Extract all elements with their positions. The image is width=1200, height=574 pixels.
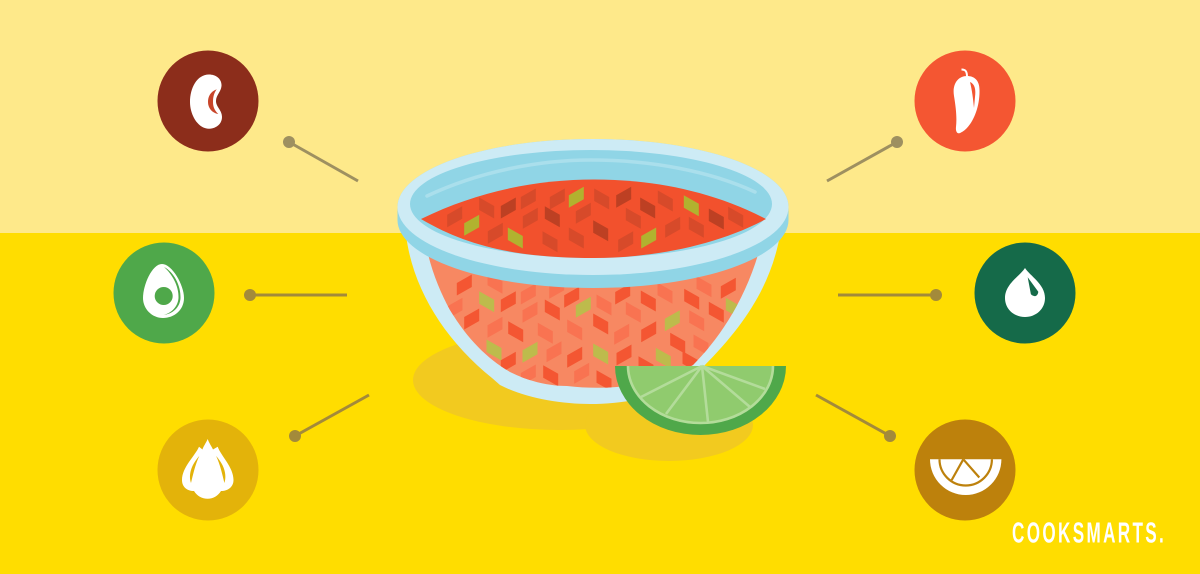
lime wedge: [615, 366, 786, 435]
lime shadow: [585, 389, 753, 461]
connector: oil: [838, 289, 942, 301]
salsa surface: [421, 180, 766, 258]
icon: kidney bean: [158, 50, 258, 152]
icon: citrus slice: [914, 420, 1016, 520]
lime flesh: [627, 366, 774, 424]
lime rind: [615, 366, 786, 435]
connector: beans: [283, 136, 358, 181]
salsa surface chunks: [447, 187, 743, 252]
connector: citrus: [816, 395, 896, 442]
rim top: [398, 139, 788, 275]
logo: Cook Smarts: COOKSMARTS.: [1012, 517, 1164, 549]
lime membranes: [628, 366, 773, 423]
connector: pepper: [827, 136, 903, 181]
bowl shadow: [413, 330, 707, 430]
connector: avocado: [244, 289, 347, 301]
bowl glass body: [406, 235, 780, 404]
background: upper wall: [0, 0, 1200, 233]
salsa seen through glass: [428, 256, 758, 388]
connector: garlic: [289, 395, 369, 442]
glass highlight: [427, 160, 755, 196]
bowl of salsa: [398, 139, 788, 404]
icon: avocado: [114, 242, 214, 344]
icon: garlic: [158, 420, 258, 520]
rim underside: [398, 139, 788, 288]
bowl interior: [410, 150, 772, 258]
icon: jalapeno pepper: [914, 50, 1016, 152]
icon: oil drop: [974, 242, 1076, 344]
background: table: [0, 233, 1200, 574]
